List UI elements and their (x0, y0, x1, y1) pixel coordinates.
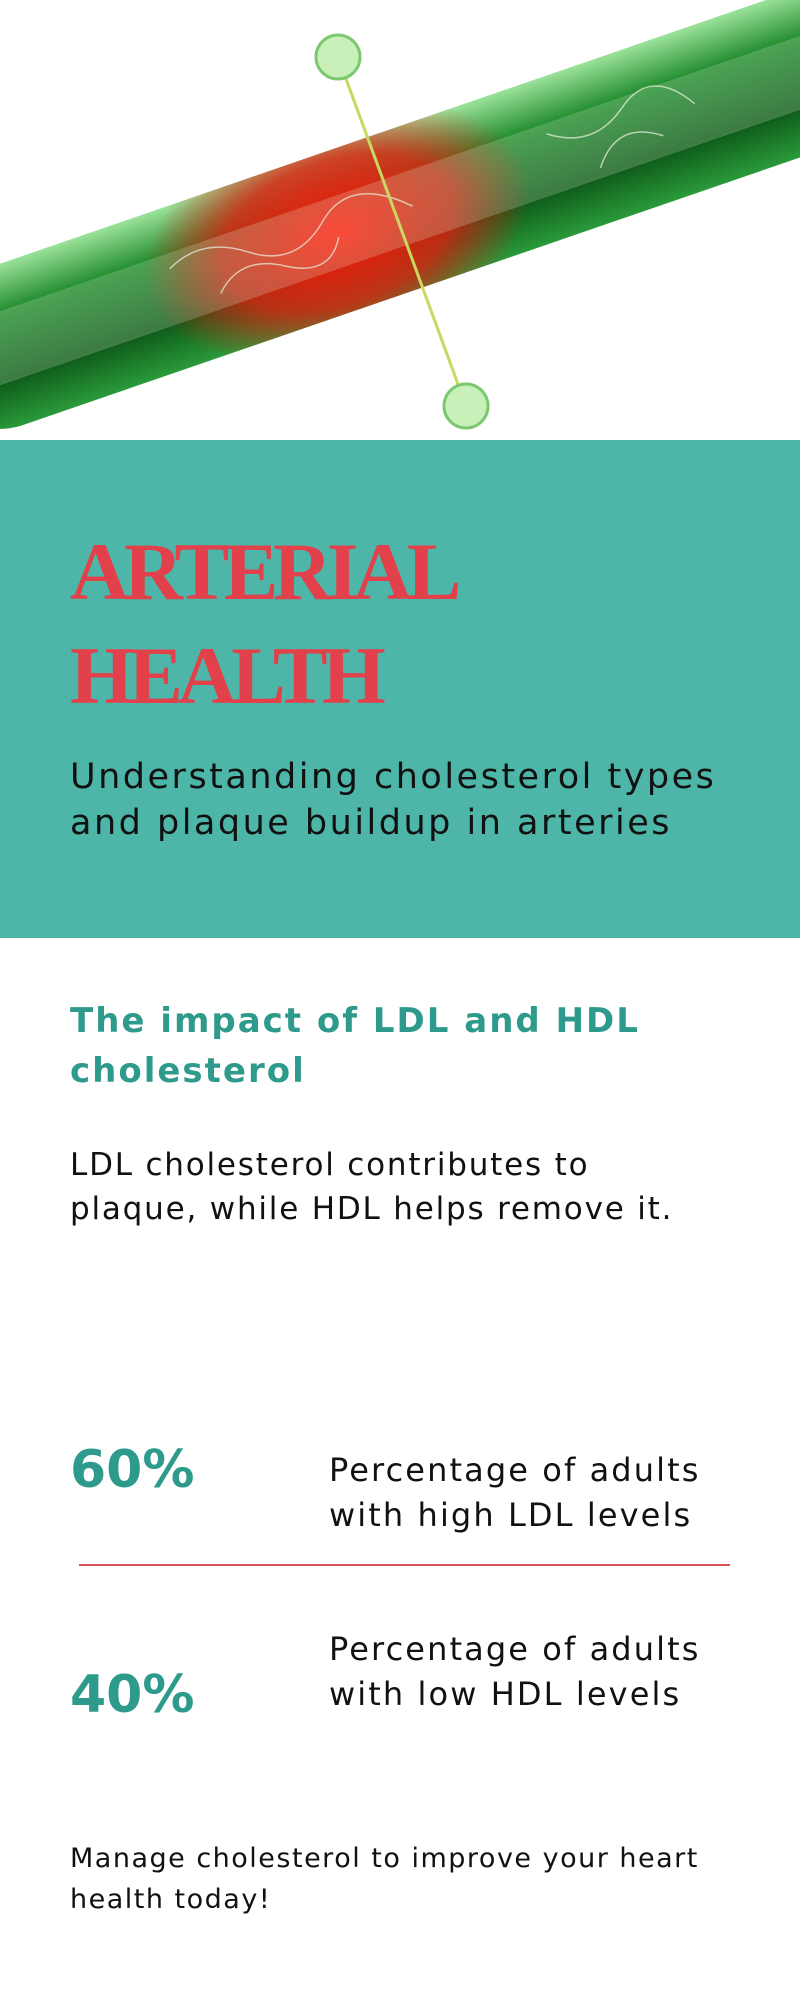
subtitle (70, 757, 716, 843)
title: HEALTH (70, 630, 380, 721)
section heading: The impact of LDL and HDL (70, 1001, 640, 1041)
stat: 40%: 40% (70, 1665, 194, 1725)
stat: 40%: Percentage of adults (329, 1630, 701, 1668)
body text (70, 1147, 673, 1227)
subtitle: and plaque buildup in arteries (70, 803, 672, 843)
stat: 60%: Percentage of adults (329, 1451, 701, 1489)
stat: 60% (70, 1440, 701, 1534)
section heading (70, 1001, 640, 1091)
title: ARTERIAL (70, 526, 456, 617)
footer call to action: health today! (70, 1884, 271, 1915)
stat: 40%: with low HDL levels (329, 1675, 681, 1713)
stat: 60%: with high LDL levels (329, 1496, 692, 1534)
section heading: cholesterol (70, 1051, 306, 1091)
body text: plaque, while HDL helps remove it. (70, 1191, 673, 1227)
hero illustration: artery (0, 0, 800, 430)
stat: 40% (70, 1630, 701, 1725)
footer call to action (70, 1843, 699, 1915)
title panel (0, 440, 800, 938)
subtitle: Understanding cholesterol types (70, 757, 716, 797)
title (70, 526, 458, 721)
stat: 60%: 60% (70, 1440, 194, 1500)
footer call to action: Manage cholesterol to improve your heart (70, 1843, 699, 1874)
body text: LDL cholesterol contributes to (70, 1147, 589, 1183)
